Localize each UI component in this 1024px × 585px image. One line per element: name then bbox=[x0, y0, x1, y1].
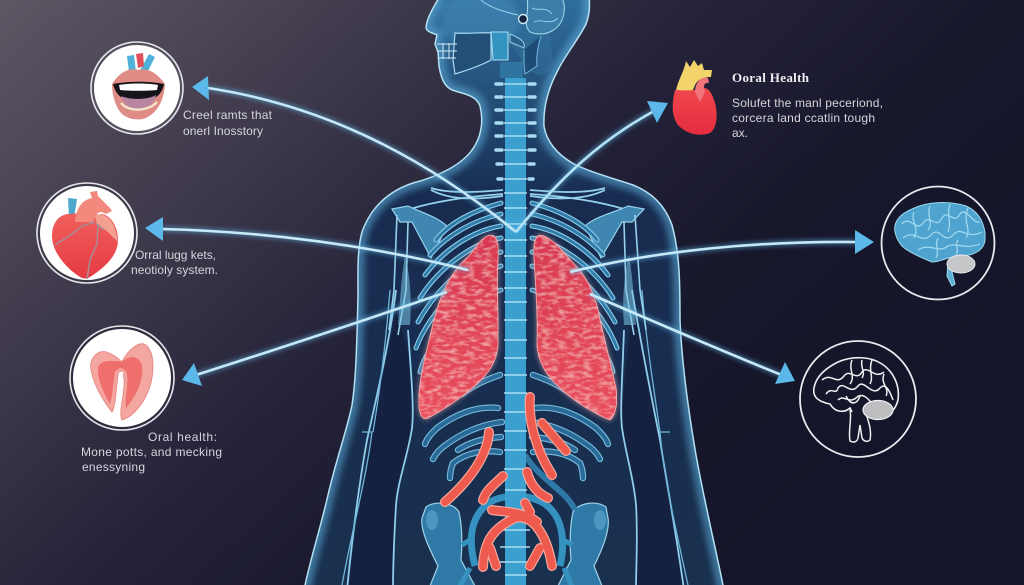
arrow: center-left to heart icon bbox=[145, 217, 468, 270]
text: Ooral Health description: Solufet the manl peceriond, bbox=[732, 96, 883, 110]
text: mouth caption: onerl Inosstory bbox=[183, 124, 263, 138]
arrow: upper-right to heart icon bbox=[516, 101, 668, 232]
rib cage left bbox=[416, 203, 502, 478]
pelvis bones bbox=[422, 455, 608, 585]
spine column bbox=[496, 78, 535, 585]
text: organ caption: enessyning bbox=[82, 460, 145, 474]
icon: standalone heart bbox=[673, 60, 717, 135]
icon: blue brain in circle bbox=[882, 186, 994, 300]
skull, jaw and brain detail bbox=[437, 0, 564, 78]
text: heart caption: Orral lugg kets, bbox=[135, 248, 216, 262]
arrow: upper-left to mouth icon bbox=[192, 76, 516, 232]
body silhouette bbox=[304, 0, 724, 585]
text: mouth caption: Creel ramts that bbox=[183, 108, 273, 122]
human body anatomy figure bbox=[304, 0, 724, 585]
icon: outline brain in circle bbox=[800, 341, 916, 457]
rib cage right bbox=[531, 203, 617, 478]
text: heart caption bbox=[131, 248, 218, 277]
text: Ooral Health description bbox=[732, 96, 883, 140]
text: heart caption: neotioly system. bbox=[131, 263, 218, 277]
icon: pink organ in circle bbox=[70, 326, 174, 430]
icon: heart in circle bbox=[37, 183, 137, 283]
red organs and intestines bbox=[445, 397, 566, 567]
text: Ooral Health description: corcera land ccatlin tough bbox=[732, 111, 875, 125]
text: organ caption: Mone potts, and mecking bbox=[81, 445, 222, 459]
arrow: lower-right to outline brain icon bbox=[590, 294, 795, 384]
text: organ caption: Oral health: bbox=[148, 430, 217, 444]
collarbones and shoulder bones bbox=[389, 188, 646, 335]
text: Ooral Health description: ax. bbox=[732, 126, 748, 140]
text: Ooral Health heading: Ooral Health bbox=[732, 70, 810, 85]
arrow: center-right to blue brain icon bbox=[570, 230, 874, 272]
left lung bbox=[419, 235, 498, 419]
text: mouth caption bbox=[183, 108, 273, 138]
right lung bbox=[534, 235, 617, 420]
icon: mouth in circle bbox=[91, 42, 183, 134]
arrow: lower-left to third icon bbox=[182, 292, 447, 386]
text: organ caption bbox=[81, 430, 222, 474]
